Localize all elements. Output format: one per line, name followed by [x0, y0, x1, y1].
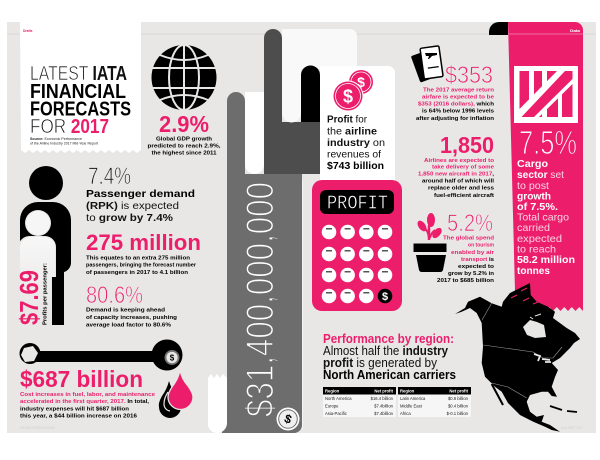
- footer credit right: AUG-SEPT 2017: [561, 426, 583, 430]
- stat: load factor: average load factor to 80.6%: [86, 322, 171, 328]
- stat: industry costs: this year, a $44 billion increase on 2016: [20, 414, 138, 420]
- stat: GDP growth: [148, 111, 221, 156]
- table: net profit, left: Region: [325, 388, 340, 394]
- panel: cargo: to post: [517, 180, 549, 192]
- icon: airline tickets: [411, 46, 443, 83]
- panel: cargo: 7.5%: [519, 124, 577, 161]
- table: net profit, left: Net profit: [374, 388, 394, 394]
- icon: calculator: $: [382, 291, 388, 303]
- panel: title: of the Airline Industry 2017 Mid-Year Report: [30, 142, 98, 146]
- stat: load factor: 80.6%: [86, 282, 143, 309]
- panel: airline profit: [320, 66, 395, 182]
- panel: airline profit: $: [343, 86, 353, 106]
- stat: passenger demand: [86, 163, 195, 224]
- panel: cargo: tonnes: [517, 265, 550, 277]
- stat: airfare: The 2017 average return: [423, 88, 495, 94]
- stat: load factor: [86, 282, 178, 328]
- panel: cargo: expected: [517, 233, 562, 245]
- icon: oil drops: [159, 369, 193, 418]
- stat: new aircraft: 1,850 new aircraft in 2017 ,: [418, 172, 494, 178]
- panel: airline profit: Profit for: [327, 114, 368, 126]
- table: net profit, left: $7.4billion: [374, 404, 394, 408]
- panel: performance by region: Almost half the industry: [323, 344, 448, 358]
- stat: airfare: airfare is expected to be: [422, 94, 494, 100]
- panel: performance by region: profit is generated by: [323, 356, 438, 370]
- icon: money plant: [414, 213, 446, 272]
- table: net profit, right: [398, 387, 471, 417]
- table: net profit, left: [323, 387, 396, 417]
- panel: performance by region: Performance by region:: [323, 332, 454, 346]
- icon: spanner: $: [170, 354, 175, 362]
- table: net profit, left: North America: [325, 396, 352, 401]
- stat: industry costs: accelerated in the first quarter, 2017. In total,: [20, 399, 149, 405]
- panel: performance by region: North American carriers: [323, 368, 456, 382]
- stat: new aircraft: take delivery of some: [432, 164, 494, 170]
- black tab above cargo panel: [489, 22, 508, 35]
- icon: globe: [151, 45, 217, 110]
- stat: GDP growth: the highest since 2011: [152, 150, 216, 156]
- panel: title: LATEST IATA: [30, 63, 127, 85]
- icon: dollar badge: $: [282, 411, 294, 427]
- icon: calculator: PROFIT: [327, 192, 388, 214]
- stat: new aircraft: around half of which will: [422, 178, 494, 184]
- table: net profit, left: $7.4billion: [374, 411, 394, 416]
- panel: title: [20, 22, 141, 153]
- stat: airfare: is 64% below 1996 levels: [422, 108, 494, 114]
- panel: cargo: 58.2 million: [517, 254, 575, 266]
- panel: cargo: to reach: [517, 244, 556, 256]
- panel: cargo: Total cargo: [517, 212, 569, 224]
- stat: tourism: on tourism: [468, 242, 494, 248]
- stat: airfare: $353: [445, 62, 493, 89]
- big number: 31.4bn: $31,400,000,000: [239, 182, 282, 417]
- stat: 275 million: This equates to an extra 275 million: [86, 256, 191, 262]
- stat: tourism: expected to: [458, 264, 495, 270]
- table: net profit, left: Asia-Pacific: [325, 411, 347, 416]
- panel: cargo: of 7.5%.: [517, 201, 558, 213]
- stat: industry costs: [20, 366, 156, 420]
- stat: 275 million: passengers, bringing the forecast number: [86, 262, 197, 268]
- stat: passenger demand: Passenger demand: [86, 188, 195, 200]
- icon: cargo crate: [514, 66, 578, 123]
- stat: passenger demand: (RPK) is expected: [86, 200, 179, 212]
- icon: calculator: [312, 180, 402, 311]
- table: net profit, right: $-0.1 billion: [447, 411, 469, 416]
- table: net profit, right: Region: [400, 388, 415, 394]
- stat: load factor: of capacity increases, pushing: [86, 315, 178, 321]
- stat: load factor: Demand is keeping ahead: [86, 308, 166, 314]
- stat: passenger demand: 7.4%: [88, 163, 131, 190]
- stat: tourism: grow by 5.2% in: [448, 271, 495, 277]
- panel: title: FOR 2017: [30, 116, 109, 138]
- stat: airfare: $353 (2016 dollars), which: [418, 102, 495, 108]
- stat: new aircraft: Airlines are expected to: [424, 158, 495, 164]
- panel: cargo: carried: [517, 222, 550, 234]
- stat: passenger demand: to grow by 7.4%: [86, 212, 174, 224]
- stat: tourism: [437, 210, 495, 284]
- stat: 275 million: of passengers in 2017 to 4.1 billion: [86, 270, 189, 276]
- panel: title: Source: Economic Performance: [30, 137, 82, 141]
- panel: cargo: Data: [570, 29, 581, 33]
- footer credit left: AIR AIR INTERNATIONAL: [20, 426, 55, 430]
- panel: title: FORECASTS: [30, 98, 131, 120]
- panel: cargo: growth: [517, 190, 551, 202]
- table: net profit, right: Net profit: [449, 388, 469, 394]
- table: net profit, left: $16.4 billion: [371, 396, 394, 401]
- panel: cargo: sector set: [517, 169, 564, 181]
- table: net profit, right: Africa: [400, 411, 411, 416]
- stat: industry costs: Cost increases in fuel, labor, and maintenance: [20, 392, 156, 398]
- stat: tourism: The global spend: [443, 236, 495, 242]
- stat: new aircraft: 1,850: [440, 132, 494, 158]
- table: net profit, right: $0.4 billion: [448, 404, 469, 408]
- stat: airfare: after adjusting for inflation: [416, 116, 495, 122]
- stat: tourism: 2017 to $685 billion: [437, 278, 495, 284]
- stat: 275 million: 275 million: [86, 230, 201, 255]
- panel: airline profit: revenues of: [327, 150, 381, 160]
- icon: spanner: [20, 340, 182, 370]
- stat: GDP growth: predicted to reach 2.9%,: [148, 144, 221, 150]
- panel: airline profit: $: [357, 74, 365, 90]
- panel: cargo: Cargo: [517, 158, 548, 170]
- map: North America: [455, 283, 580, 432]
- stat: GDP growth: Global GDP growth: [156, 136, 213, 142]
- panel: performance by region: [323, 332, 471, 417]
- panel: cargo: [508, 22, 583, 311]
- icon: passenger figures: $7.69: [14, 270, 44, 325]
- stat: 275 million: [86, 230, 201, 276]
- icon: passenger figures: Profits per passenger:: [42, 263, 48, 325]
- stat: industry costs: industry expenses will hit $687 billion: [20, 406, 129, 412]
- graphic: rising bars: [208, 29, 357, 433]
- panel: airline profit: the airline: [327, 126, 377, 138]
- stat: tourism: enabled by air: [451, 250, 495, 256]
- stat: tourism: 5.2%: [447, 210, 493, 237]
- table: net profit, right: Latin America: [400, 396, 426, 401]
- stat: new aircraft: [418, 132, 495, 199]
- table: net profit, right: Middle East: [400, 404, 423, 408]
- icon: dollar badge: [276, 408, 300, 430]
- panel: airline profit: industry on: [327, 138, 385, 149]
- table: net profit, left: Europe: [325, 404, 339, 408]
- panel: title: Drafts: [23, 29, 32, 33]
- stat: tourism: transport is: [461, 257, 494, 263]
- stat: new aircraft: fuel-efficient aircraft: [434, 193, 494, 199]
- icon: passenger figures: [14, 166, 71, 325]
- stat: airfare: [416, 62, 495, 122]
- panel: title: FINANCIAL: [30, 81, 126, 103]
- stat: new aircraft: replace older and less: [428, 186, 494, 192]
- stat: industry costs: $687 billion: [20, 366, 143, 392]
- table: net profit, right: $0.8 billion: [448, 396, 469, 401]
- panel: airline profit: $743 billion: [327, 161, 384, 172]
- stat: GDP growth: 2.9%: [159, 111, 209, 137]
